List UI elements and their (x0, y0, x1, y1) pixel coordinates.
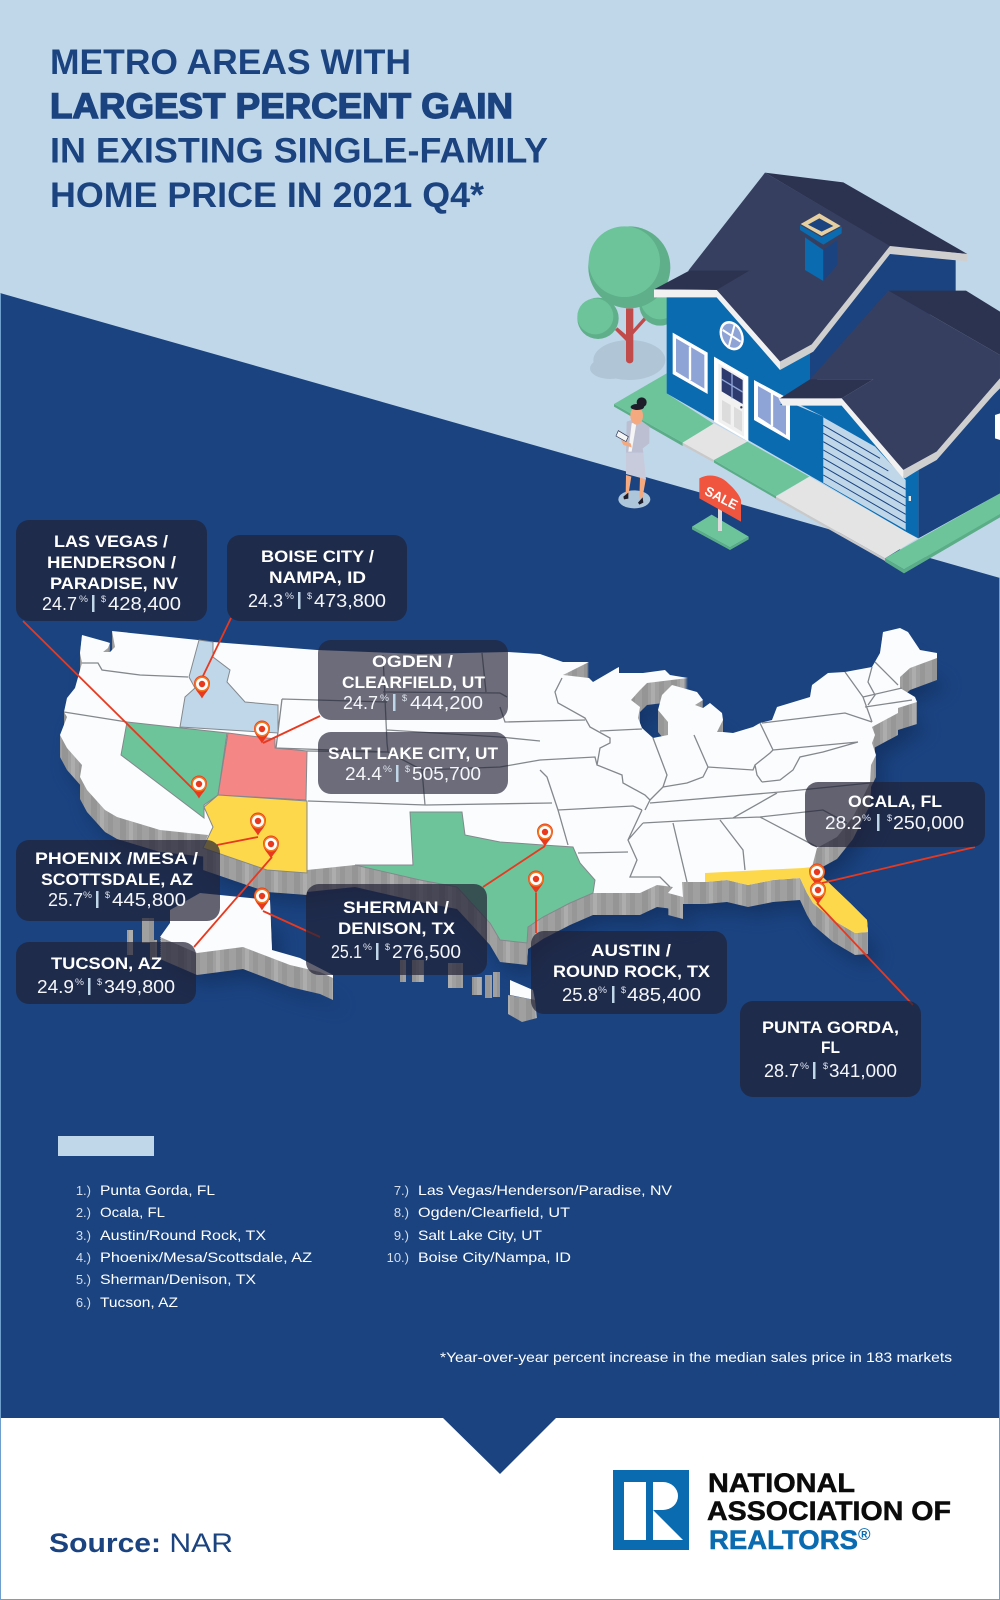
callout: Las Vegas: 428,400 (108, 594, 181, 614)
callout: Phoenix: % (83, 890, 92, 900)
callout: Tucson: TUCSON, AZ (51, 955, 162, 973)
ranked list: left column: Tucson, AZ (100, 1294, 178, 1310)
title line 4: HOME PRICE IN 2021 Q4* (50, 176, 484, 215)
callout: Sherman: $ (385, 942, 390, 952)
callout: Ocala (805, 782, 985, 847)
sign text: SALE (702, 483, 740, 513)
callout: Tucson: 349,800 (104, 977, 175, 997)
callout: Las Vegas (16, 520, 207, 621)
Arizona highlight (203, 795, 307, 873)
callout: Boise City: BOISE CITY / (261, 548, 374, 566)
callout: Phoenix (16, 840, 220, 921)
callout: Austin (531, 931, 727, 1014)
callout: Punta Gorda: FL (821, 1039, 840, 1057)
callout: Sherman (306, 884, 487, 975)
ranked list: right column: 8.) (394, 1205, 409, 1220)
left window (673, 333, 708, 394)
callout: Ocala: 250,000 (893, 813, 964, 833)
callout: Salt Lake City: 505,700 (412, 764, 481, 784)
callout: Punta Gorda: % (800, 1061, 809, 1071)
ranked list: left column: 1.) (76, 1183, 91, 1198)
right window (754, 380, 790, 441)
title line 3: IN EXISTING SINGLE-FAMILY (50, 132, 548, 170)
map pins (191, 676, 826, 910)
legend heading bar (58, 1136, 154, 1156)
callout: Austin: 485,400 (627, 985, 701, 1005)
state boundary lines (64, 653, 912, 887)
callout: Punta Gorda: 341,000 (829, 1061, 897, 1081)
callout: Ogden: CLEARFIELD, UT (342, 674, 485, 692)
ranked list: left column: Austin/Round Rock, TX (100, 1227, 267, 1243)
footnote: *Year-over-year percent increase in the median sales price in 183 markets (440, 1349, 952, 1365)
callout: Punta Gorda: $ (823, 1061, 828, 1071)
callout: Ocala: $ (887, 813, 892, 823)
callout: Boise City (227, 535, 407, 621)
callout: Boise City: 473,800 (314, 591, 386, 611)
logo: National Association of Realtors (613, 1468, 951, 1555)
callout: Salt Lake City: $ (405, 764, 410, 774)
callout: Las Vegas: PARADISE, NV (50, 575, 178, 593)
map land surface (60, 628, 937, 943)
callout: Boise City: $ (307, 591, 312, 601)
Idaho highlight (180, 640, 278, 733)
Utah highlight (218, 733, 307, 800)
Florida highlight (705, 867, 868, 933)
chimney (800, 213, 842, 281)
ranked list: right column: Boise City/Nampa, ID (418, 1249, 571, 1265)
callout: Ocala: OCALA, FL (848, 793, 942, 811)
logo text: ® (858, 1525, 871, 1544)
footer panel (0, 1418, 1000, 1600)
house (654, 173, 1000, 538)
callout: Ogden: $ (402, 693, 407, 703)
ranked list: left column: Punta Gorda, FL (100, 1182, 215, 1198)
callout: Phoenix: PHOENIX /MESA / (35, 850, 198, 868)
callout: Tucson: 24.9 (37, 977, 74, 997)
callout: Sherman: % (363, 942, 372, 952)
callout: Salt Lake City: SALT LAKE CITY, UT (328, 745, 498, 763)
ranked list: left column: 2.) (76, 1205, 91, 1220)
callout: Austin: $ (621, 985, 626, 995)
ranked list: right column: Las Vegas/Henderson/Paradise, NV (418, 1182, 673, 1198)
ranked list: left column: 3.) (76, 1228, 91, 1243)
callout: Las Vegas: % (79, 594, 88, 604)
ranked list: right column: 10.) (387, 1250, 409, 1265)
callout: Phoenix: 25.7 (48, 890, 83, 910)
lawn and driveway (614, 373, 1000, 573)
callout: Ogden (318, 640, 508, 720)
callout: Austin: ROUND ROCK, TX (553, 963, 710, 981)
logo mark (613, 1470, 689, 1550)
callout: Ocala: % (862, 813, 871, 823)
illustration: house, tree, agent and sale sign (577, 173, 1000, 573)
Texas highlight (355, 812, 595, 943)
callout: Las Vegas: LAS VEGAS / (54, 533, 168, 551)
callout: Las Vegas: HENDERSON / (47, 554, 176, 572)
callout: Ocala: 28.2 (825, 813, 862, 833)
callout: Phoenix: SCOTTSDALE, AZ (41, 871, 193, 889)
callout: Salt Lake City: % (383, 764, 392, 774)
callout: Las Vegas: 24.7 (42, 594, 77, 614)
ranked list: left column: Sherman/Denison, TX (100, 1271, 257, 1287)
callout: Punta Gorda: PUNTA GORDA, (762, 1019, 899, 1037)
realtor figure (616, 397, 650, 508)
ranked list: right column: 9.) (394, 1228, 409, 1243)
callout: Sherman: DENISON, TX (338, 920, 455, 938)
callout: Tucson: $ (97, 977, 102, 987)
callout: Boise City: NAMPA, ID (269, 569, 366, 587)
ranked list: right column: Salt Lake City, UT (418, 1227, 542, 1243)
callout: Phoenix: 445,800 (112, 890, 186, 910)
title (50, 43, 548, 215)
navy diagonal panel (0, 293, 1000, 1480)
callout: Austin: AUSTIN / (591, 942, 671, 960)
callout: Salt Lake City: 24.4 (345, 764, 382, 784)
ranked list: left column: 5.) (76, 1272, 91, 1287)
tree (577, 226, 681, 380)
map extruded walls (60, 629, 937, 1022)
callout: Boise City: % (285, 591, 294, 601)
logo text (707, 1468, 951, 1555)
title line 2: LARGEST PERCENT GAIN (50, 87, 513, 126)
callout: Tucson (16, 942, 196, 1004)
callout: Las Vegas: $ (101, 594, 106, 604)
logo text: NATIONAL (708, 1468, 855, 1498)
ranked list: left column: Phoenix/Mesa/Scottsdale, AZ (100, 1249, 313, 1265)
ranked list: right column: 7.) (394, 1183, 409, 1198)
callout: Salt Lake City (318, 732, 508, 794)
round window (715, 317, 748, 354)
callout: Sherman: SHERMAN / (343, 899, 449, 917)
callout: Ogden: 444,200 (410, 693, 483, 713)
callout: Austin: % (598, 985, 607, 995)
logo text: ASSOCIATION OF (707, 1496, 951, 1526)
connector lines (23, 618, 975, 1005)
callout: Sherman: 276,500 (392, 942, 461, 962)
callout: Phoenix: $ (105, 890, 110, 900)
callout: Austin: 25.8 (562, 985, 598, 1005)
ranked list: right column: Ogden/Clearfield, UT (418, 1204, 571, 1220)
ranked list: left column: 6.) (76, 1295, 91, 1310)
callout: Sherman: 25.1 (331, 942, 362, 962)
callout: Punta Gorda: 28.7 (764, 1061, 799, 1081)
sale sign (692, 476, 749, 550)
ranked list: right column (387, 1182, 673, 1265)
logo text: REALTORS (709, 1525, 858, 1555)
callout: Punta Gorda (740, 1001, 921, 1097)
ranked list: left column: 4.) (76, 1250, 91, 1265)
callout: Ogden: OGDEN / (372, 653, 453, 671)
ranked list: left column (76, 1182, 313, 1310)
front door (714, 357, 748, 442)
map drop shadow (68, 658, 945, 1008)
callout: Ogden: % (380, 693, 389, 703)
callout: Boise City: 24.3 (248, 591, 283, 611)
garage wing (778, 291, 1000, 538)
ranked list: left column: Ocala, FL (100, 1204, 165, 1220)
source: Source: NAR (49, 1528, 233, 1558)
callout: Ogden: 24.7 (343, 693, 378, 713)
US map (60, 628, 945, 1022)
title line 1: METRO AREAS WITH (50, 43, 411, 82)
Nevada highlight (121, 722, 227, 818)
callout: Tucson: % (75, 977, 84, 987)
